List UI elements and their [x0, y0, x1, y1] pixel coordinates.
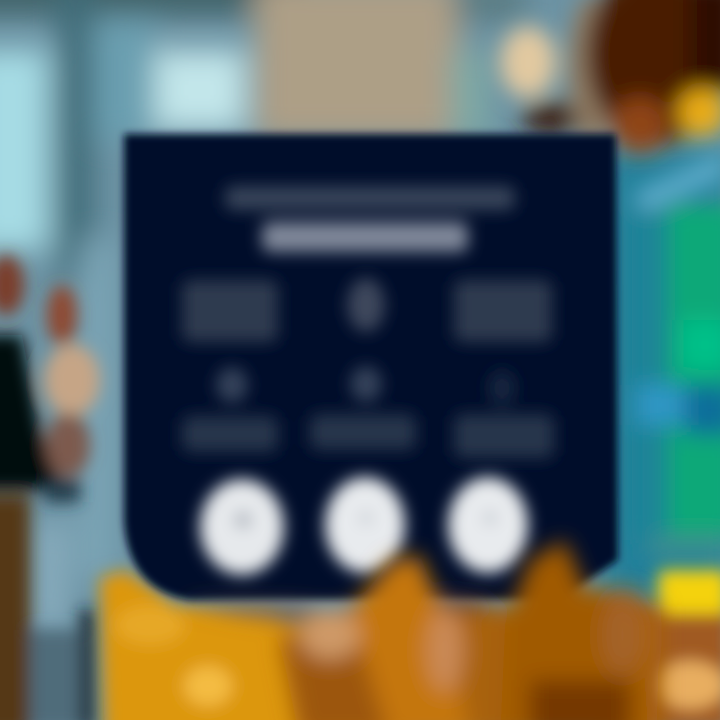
row 2 icons and text: [182, 366, 554, 458]
white circular badges: [200, 477, 528, 575]
badge 2: [325, 477, 405, 573]
heading text block: [225, 186, 515, 252]
badge 3: [448, 477, 528, 573]
row 1 text and icon: [182, 278, 552, 342]
person, left edge: [0, 255, 100, 720]
orange hand fingers: [180, 540, 660, 720]
colourful package, right edge: [632, 150, 720, 559]
cream blob and brown object, top right: [500, 0, 720, 153]
yellow bag, bottom: [100, 570, 420, 720]
dark navy card: [124, 134, 618, 600]
yellow label on package: [600, 570, 720, 720]
badge 1: [200, 479, 284, 575]
